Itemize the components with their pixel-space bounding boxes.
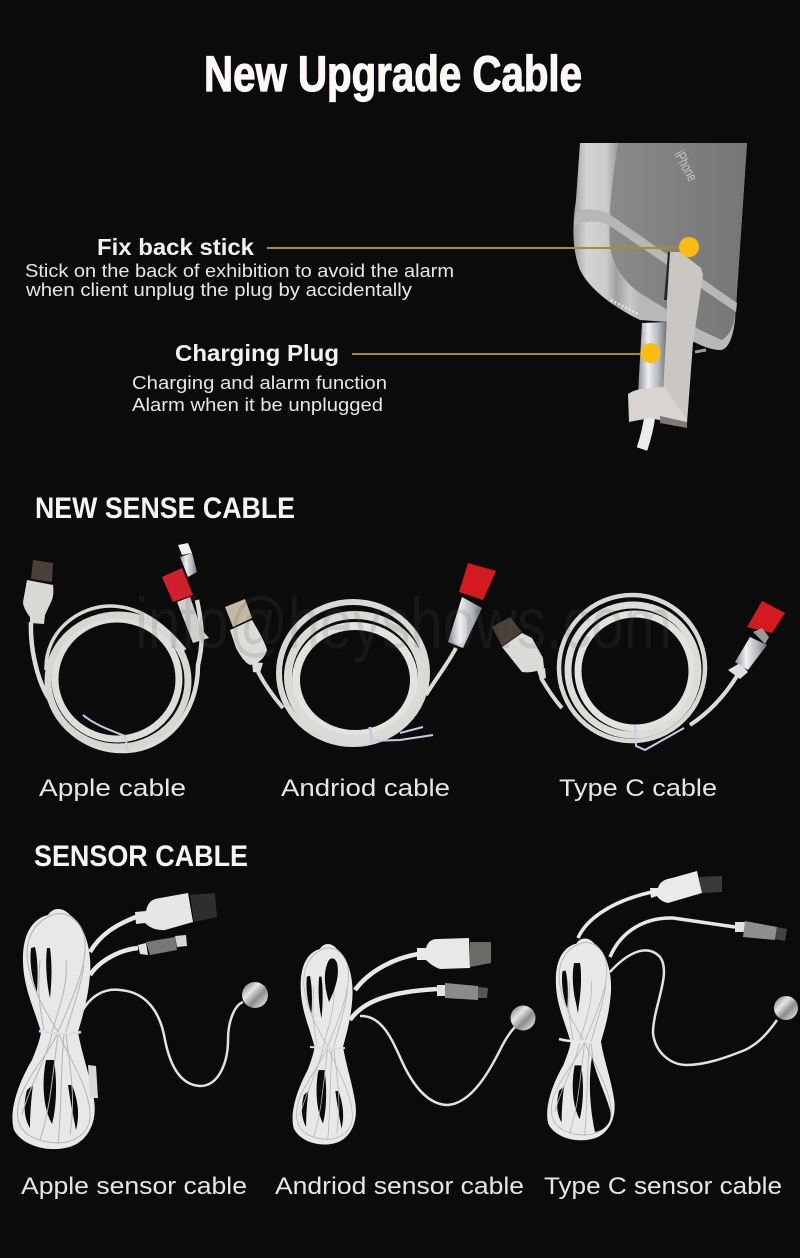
lightning plug [138,943,148,955]
red pad and type c plug [728,663,748,679]
callout text: fix back stick: Fix back stick [97,234,254,260]
panel: phone with charging plug photo [573,143,747,449]
heading: new sense cable: NEW SENSE CABLE [35,492,295,525]
callout text: charging plug [132,340,387,415]
speaker holes [611,300,638,314]
callout text: fix back stick: when client unplug the plug by accidentally [25,280,412,300]
title: New Upgrade Cable [204,46,582,102]
plug collar [628,387,687,426]
clip stick [663,252,703,423]
coil [258,672,283,708]
usb plug [699,876,722,893]
heading: sensor cable: SENSOR CABLE [34,840,248,873]
label: apple cable: Apple cable [39,775,186,802]
product: android sensor cable [293,938,536,1145]
usb plug [31,560,53,582]
loop openings [573,963,611,1132]
micro plug [437,985,445,996]
callout text: charging plug: Charging and alarm function [132,373,387,393]
sensor wire [360,1016,515,1105]
product: type c cable [492,595,785,750]
sensor disk [242,982,268,1008]
cable bundle [547,939,615,1140]
tie [39,1031,81,1034]
cable to plug [426,648,456,695]
inline block [88,1065,98,1098]
label: type c cable: Type C cable [559,775,717,802]
cable bundle [293,944,356,1145]
product: type c sensor cable [547,871,798,1140]
tie and tails [370,727,372,744]
callout line: fix back stick [267,237,699,257]
phone body [573,143,747,350]
usb cable [90,917,136,952]
usb cable [355,954,418,990]
usb plug [190,893,217,922]
usb cable [578,892,652,938]
usb plug [225,599,252,627]
cable bundle [12,909,95,1149]
tie [83,715,128,752]
type c plug [735,922,745,932]
phone antenna band [574,209,737,312]
top loop opening [325,958,338,1002]
coil [541,678,562,708]
callout text: charging plug: Charging Plug [175,340,339,366]
product: android cable [225,563,496,744]
coil [31,600,202,751]
label: type c sensor cable: Type C sensor cable [544,1173,782,1200]
sensor disk [774,996,798,1020]
watermark: info@heyshows.com [135,584,672,664]
sensor wire [80,990,243,1086]
label: apple sensor cable: Apple sensor cable [21,1173,247,1200]
label: android sensor cable: Andriod sensor cable [275,1173,524,1200]
callout line: charging plug [352,343,660,363]
callout text: fix back stick [25,234,454,300]
lightning cable [90,948,138,975]
label: android cable: Andriod cable [281,775,450,802]
product: apple cable [23,543,209,752]
callout dot [679,237,699,257]
micro cable [350,989,437,1020]
small pin [695,350,706,352]
cable to plug [690,676,737,725]
tie [559,1039,591,1042]
red pad and lightning plug [177,597,209,643]
callout dot [640,343,660,363]
red pad and micro plug [448,597,482,648]
sensor disk [510,1006,536,1030]
tie [310,1047,345,1048]
cable stub [642,415,650,449]
charging plug silver barrel [638,322,667,394]
sensor wire [610,950,777,1065]
product: apple sensor cable [12,893,268,1149]
tie and tail [635,725,684,750]
callout text: fix back stick: Stick on the back of exhibition to avoid the alarm [25,261,454,281]
usb plug [492,617,522,646]
usb plug [470,942,491,967]
back panel [609,143,747,340]
callout text: charging plug: Alarm when it be unplugged [132,395,383,415]
phone brand text: iPhone [670,148,701,184]
type c cable [610,918,735,957]
